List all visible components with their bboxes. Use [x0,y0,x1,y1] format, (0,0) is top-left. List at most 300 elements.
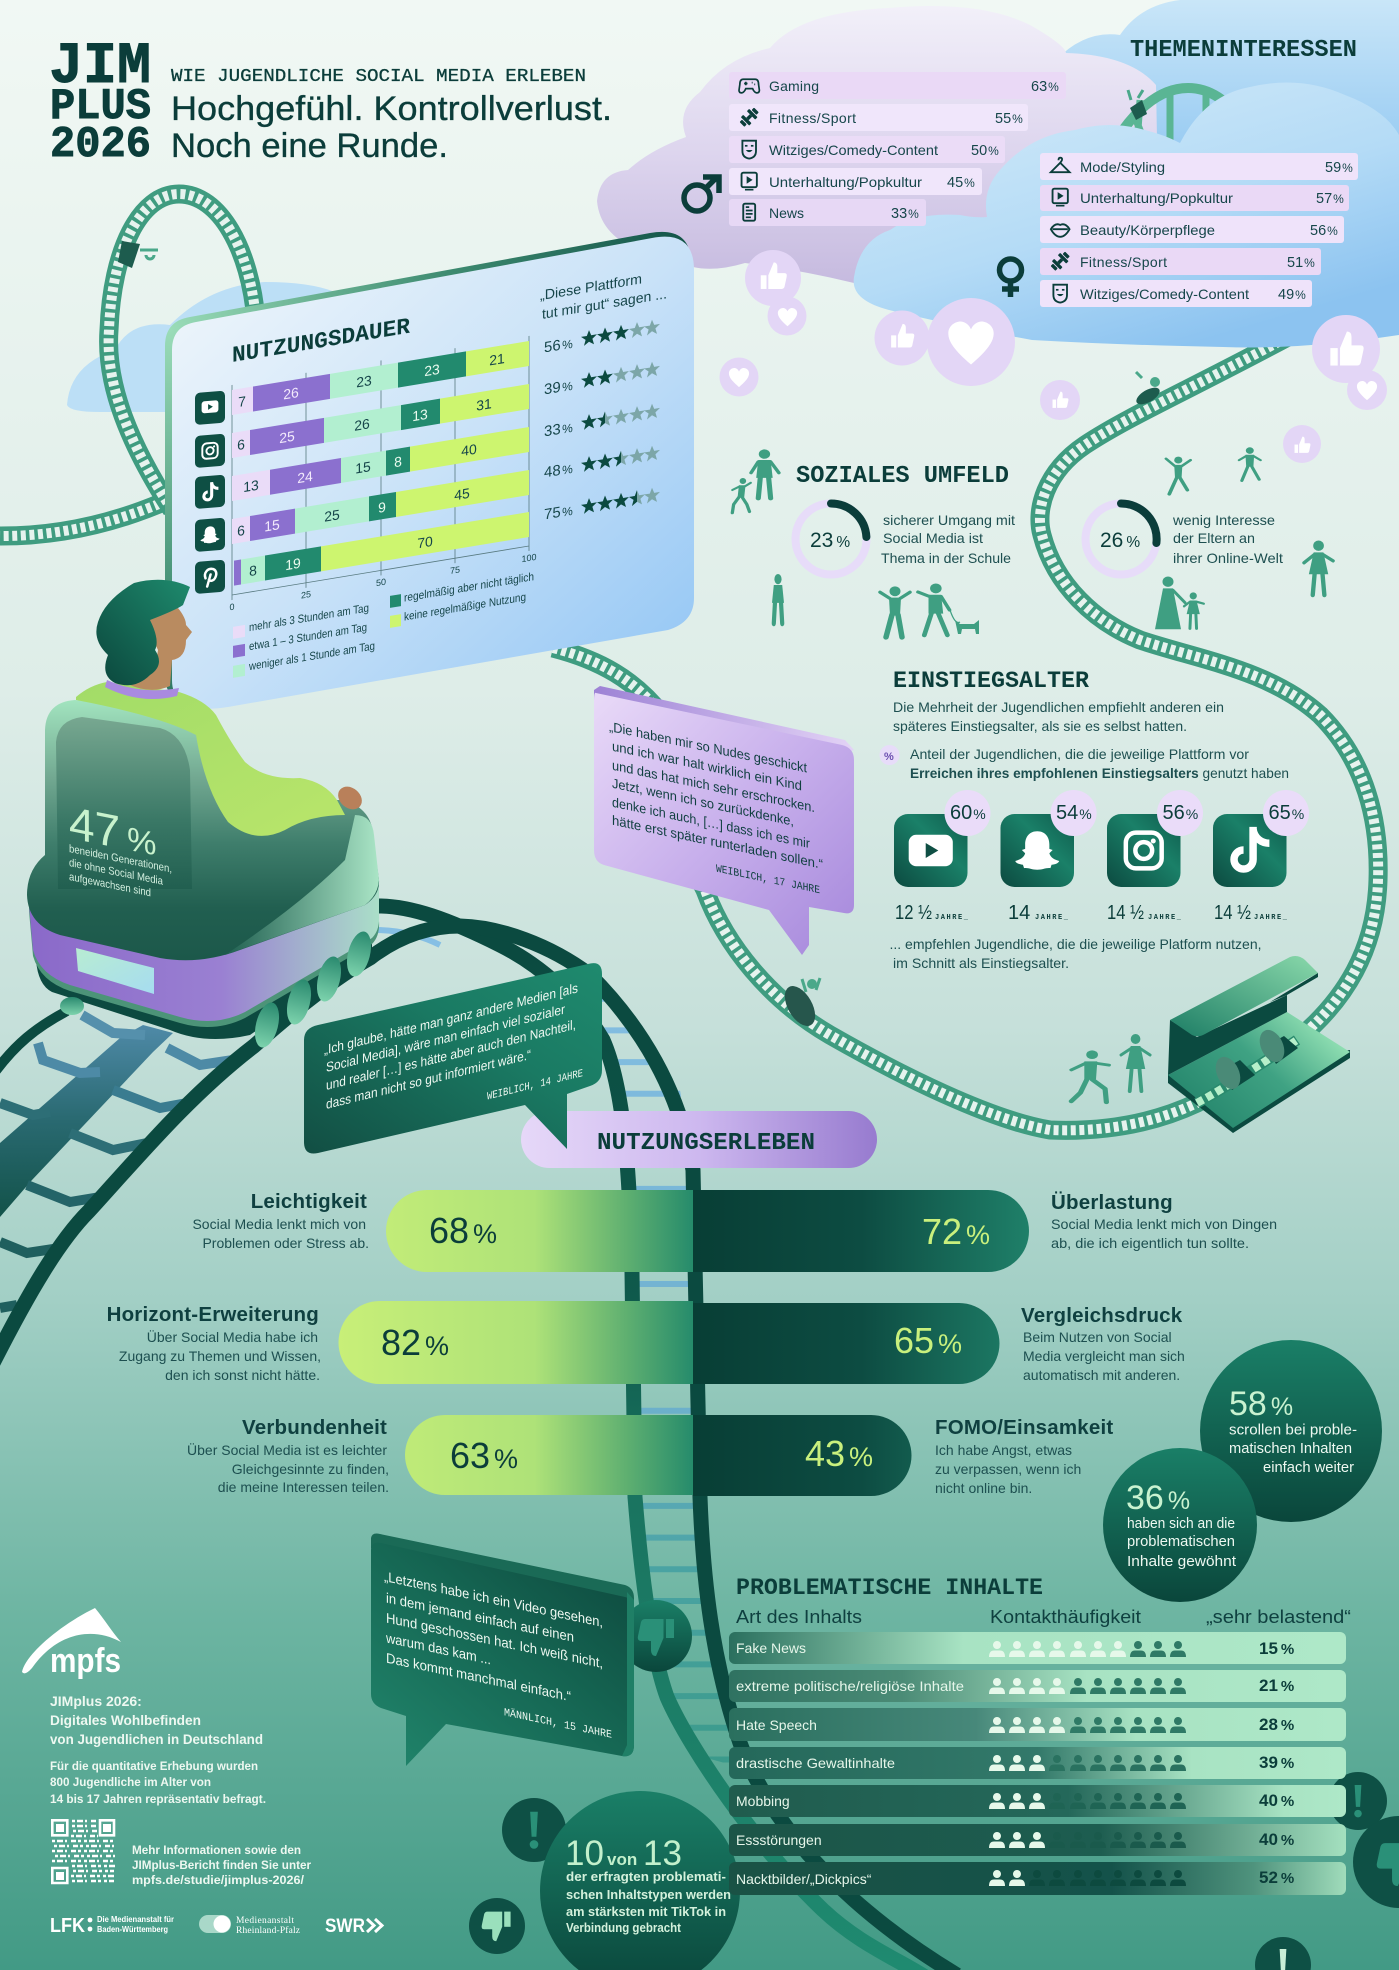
column headers [736,1607,1351,1627]
heading pill: nutzungserleben: NUTZUNGSERLEBEN [597,1130,815,1157]
row: gewaltinhalte: drastische Gewaltinhalte [736,1755,895,1771]
quote: green 1 [304,963,602,1154]
positive bars: 68% [429,1210,497,1251]
seat [27,700,379,960]
row: mobbing: Mobbing [736,1793,790,1809]
label: vergleichsdruck: Vergleichsdruck [1021,1304,1183,1327]
female bars: Unterhaltung/Popkultur [1080,190,1233,206]
text 26: wenig Interesse [1172,512,1275,528]
bar: instagram: 13 [412,406,428,424]
rim [594,686,854,752]
label: vergleichsdruck [1021,1304,1185,1383]
column headers: Art des Inhalts [736,1607,862,1627]
text: Social Media], wäre man einfach viel sozialer [326,1002,565,1075]
callout: 58 percent: einfach weiter [1263,1460,1354,1476]
row: gewaltinhalte [729,1747,1346,1779]
ages [895,902,1288,924]
callout: 10 von 13: 13 [643,1834,682,1873]
icon: tiktok: 65% [1268,802,1304,824]
label: ueberlastung: Überlastung [1051,1191,1173,1214]
rating column: 39% [544,377,573,398]
text: Das kommt manchmal einfach.“ [386,1650,571,1704]
male bars: 45% [947,175,975,191]
purple base [29,880,379,1021]
icon: tiktok [1213,790,1309,887]
bar: snapchat: 9 [378,499,386,516]
text: „Ich glaube, hätte man ganz andere Medien [als [324,980,578,1057]
label: fomo: zu verpassen, wenn ich [935,1461,1081,1477]
positive bars: 63% [450,1435,518,1476]
bubble [594,693,854,955]
row: fake news: Fake News [736,1640,806,1656]
heading: EINSTIEGSALTER [893,669,1090,695]
male bars: News [769,205,804,221]
study title [50,1693,263,1747]
rim [371,1534,634,1606]
study title: von Jugendlichen in Deutschland [50,1731,263,1747]
bar: snapchat: 6 [237,522,245,539]
panel: problematische inhalte [729,1575,1351,1895]
quote text: WEIBLICH, 17 JAHRE [716,864,820,897]
ages: 12 ½ [895,902,932,924]
callout: 58 percent: 58% [1229,1385,1293,1423]
text: „Letztens habe ich ein Video gesehen, [384,1568,603,1630]
row: gewaltinhalte: 39% [1259,1753,1294,1772]
bar: pinterest [234,512,529,586]
label: leichtigkeit: Problemen oder Stress ab. [202,1235,369,1251]
callout: 58 percent: scrollen bei proble- [1229,1422,1357,1438]
quote text: denke ich auch, […] dass ich es mir [612,795,810,851]
more info [132,1843,311,1887]
bar: pinterest: 8 [249,562,257,579]
male bars: 55% [995,111,1023,127]
ages: JAHRE_ [1035,914,1069,922]
girl bottom [1121,1034,1150,1091]
legend: regelmäßig aber nicht täglich [404,571,534,605]
bar: instagram [232,384,529,458]
riders on track [118,90,1162,1031]
negative bars: 43% [805,1433,873,1474]
rider: upper right [1134,372,1162,408]
logo: medienanstalt rlp: Medienanstalt [236,1916,294,1926]
panel: soziales umfeld [796,463,1283,574]
male bars: Unterhaltung/Popkultur [769,174,922,190]
rider: arch [1128,90,1147,120]
female bars: Fitness/Sport [1080,254,1167,270]
ages: 14 ½ [1107,902,1144,924]
positive bars [338,1190,693,1495]
label: horizont [107,1303,321,1383]
more info: JIMplus-Bericht finden Sie unter [132,1858,311,1872]
donut 26 [1086,503,1157,574]
callout: 36 percent: haben sich an die [1127,1516,1235,1532]
icon: youtube: 60% [950,802,986,824]
station [1168,956,1350,1133]
stat 47: aufgewachsen sind [69,871,151,899]
ages: JAHRE_ [1254,914,1288,922]
rating column: „Diese Plattform [540,270,642,303]
rating column: 75% [544,502,573,523]
more info: mpfs.de/studie/jimplus-2026/ [132,1873,305,1887]
child [732,478,751,513]
qr code [52,1820,115,1883]
quote text: Jetzt, wenn ich so zurückdenke, [612,776,794,829]
bar: snapchat: 45 [454,485,470,503]
axis labels: 50 [376,577,386,588]
seat back panel [56,717,192,889]
label: verbundenheit: Gleichgesinnte zu finden, [232,1461,389,1477]
logo: mpfs: mpfs [50,1642,121,1680]
quote: purple [594,686,854,955]
axis labels: 75 [450,564,460,576]
bar: pinterest: 70 [417,533,433,551]
quote: green 3 [371,1534,634,1766]
callout: 58 percent: matischen Inhalten [1229,1441,1352,1457]
callout: 36 percent: problematischen [1127,1534,1235,1550]
logo: lfk [50,1915,174,1937]
bar: tiktok [232,427,529,501]
callout: 10 von 13: von [607,1850,637,1869]
label: fomo [935,1416,1113,1496]
text 23: sicherer Umgang mit [883,512,1015,528]
intro: Die Mehrheit der Jugendlichen empfiehlt anderen ein [893,699,1224,715]
female bars: 49% [1278,287,1306,303]
legend [233,571,534,678]
logo: medienanstalt rlp: Rheinland-Pfalz [236,1925,300,1936]
mother and child [1155,576,1204,629]
percent legend [880,745,1289,781]
front rail [0,926,957,1970]
cloud: male interests [597,6,1160,300]
rider hair [96,580,190,685]
standing kid [772,574,784,623]
logo: lfk: Baden-Württemberg [97,1925,168,1934]
coaster car with rider [27,580,379,1050]
kicker: WIE JUGENDLICHE SOCIAL MEDIA ERLEBEN [171,67,586,87]
row: essstoerungen [729,1824,1346,1856]
axis labels [229,552,537,612]
row: nacktbilder [729,1862,1346,1895]
track: big curve right [553,325,1378,1130]
row: extreme inhalte [729,1670,1346,1702]
legend: keine regelmäßige Nutzung [404,592,526,624]
heading: SOZIALES UMFELD [796,463,1009,490]
title block [49,35,612,170]
text 26: ihrer Online-Welt [1173,550,1283,566]
panel: einstiegsalter [880,669,1309,971]
text: dass man nicht so gut informiert wäre.“ [326,1047,531,1112]
percent legend: Erreichen ihres empfohlenen Einstiegsalters genutzt haben [910,765,1289,781]
quote text: und ich war halt wirklich ein Kind [612,739,802,793]
cloud: left behind screen [67,282,335,412]
panel: themeninteressen [684,37,1358,307]
bar: snapchat: 15 [264,516,280,535]
label: fomo: Ich habe Angst, etwas [935,1442,1072,1458]
bar: youtube: 26 [283,384,299,403]
logo: swr: SWR [325,1916,365,1937]
shadow of track [0,1015,233,1308]
wheels [60,929,375,1050]
donut 23: 23% [810,529,850,552]
row: hate speech: 28% [1259,1715,1294,1734]
callout: 36 percent: Inhalte gewöhnt [1127,1554,1236,1570]
female bars: Mode/Styling [1080,159,1165,175]
rider: loop [118,241,158,268]
runner [1239,447,1261,481]
label: leichtigkeit: Leichtigkeit [251,1190,367,1213]
percent legend: Anteil der Jugendlichen, die die jeweilige Plattform vor [910,746,1249,762]
donut 26: 26% [1100,529,1140,552]
bar: tiktok: 24 [297,468,313,486]
callout: 10 von 13: der erfragten problemati- [566,1869,726,1884]
label: verbundenheit: Über Social Media ist es leichter [187,1441,387,1458]
undercarriage [36,925,372,1039]
column headers: Kontakthäufigkeit [990,1607,1141,1627]
text: Hund geschossen hat. Ich weiß nicht, [386,1610,603,1671]
method [50,1759,266,1806]
rating column: 56% [544,335,573,356]
male bars: 33% [891,206,919,222]
like and heart bubbles [720,250,1387,463]
text 26 [1172,512,1283,566]
icon circles: warning and dislike [469,1600,1399,1970]
bar: youtube [232,341,529,415]
logo: lfk: Die Medienanstalt für [97,1915,174,1924]
screen rim [165,232,691,703]
logo: lfk: LFK [50,1915,85,1937]
label: horizont: den ich sonst nicht hätte. [165,1367,320,1383]
percent legend: % [884,751,894,763]
bar: youtube: 23 [356,372,372,390]
headline [171,90,612,165]
axis labels: 100 [521,552,537,564]
panel: nutzungsdauer screen [165,232,694,709]
label: verbundenheit: Verbundenheit [242,1416,387,1439]
upper tie [375,930,440,945]
row: essstoerungen: 40% [1259,1830,1294,1849]
label: vergleichsdruck: Beim Nutzen von Social [1023,1329,1172,1345]
bar: instagram: 26 [354,415,370,434]
bar: tiktok: 13 [243,477,259,495]
female bars: 56% [1310,223,1338,239]
callout: 10 von 13: schen Inhaltstypen werden [566,1887,731,1902]
bar: youtube: 7 [238,393,246,410]
headline: Hochgefühl. Kontrollverlust. [171,90,612,128]
text: WEIBLICH, 14 JAHRE [487,1068,583,1104]
female bars: 59% [1325,160,1353,176]
text: in dem jemand einfach auf einen [386,1590,574,1645]
quote text [609,719,823,898]
screen face [172,237,694,709]
row: hate speech [729,1708,1346,1741]
female bars [1040,153,1358,307]
right edge [622,1592,634,1756]
callout: 10 von 13 [540,1791,740,1970]
study title: Digitales Wohlbefinden [50,1712,201,1728]
girl right [1304,540,1333,595]
quote text: hätte erst später runterladen sollen.“ [612,813,823,872]
label: leichtigkeit [192,1190,369,1251]
cloud: female interests [854,82,1399,348]
text [384,1568,612,1742]
female bars: 57% [1316,191,1344,207]
name plate [76,948,154,994]
label: ueberlastung: ab, die ich eigentlich tun sollte. [1051,1235,1249,1251]
text: MÄNNLICH, 15 JAHRE [504,1706,612,1742]
male bars: 50% [971,143,999,159]
callout: 36 percent: 36% [1126,1479,1190,1517]
intro: späteres Einstiegsalter, als sie es selbst hatten. [893,718,1187,734]
row: mobbing: 40% [1259,1791,1294,1810]
ages: 14 ½ [1214,902,1251,924]
rider hand [334,782,366,814]
row: mobbing [729,1785,1346,1817]
male bars: Gaming [769,78,819,94]
stat 47: 47% [69,796,156,865]
stars [581,318,660,514]
icon: snapchat [1000,790,1097,887]
track: arch between clouds [1116,88,1245,170]
icon: youtube [894,790,990,887]
bar: tiktok: 8 [394,453,402,470]
logo wordmark: JIM [49,35,151,100]
footer [22,1608,382,1937]
donut 23 [796,504,866,574]
foreground rails [0,906,957,1970]
text [324,979,583,1143]
study title: JIMplus 2026: [50,1693,142,1709]
label: verbundenheit [187,1416,389,1495]
text 23: Social Media ist [883,530,983,546]
rider body [76,682,345,836]
negative bars [693,1190,1029,1496]
bar: snapchat: 25 [324,506,340,525]
text: und realer […] es hätte aber auch den Nachteil, [326,1017,576,1093]
ages: JAHRE_ [935,914,969,922]
closing text: im Schnitt als Einstiegsalter. [893,955,1069,971]
rating column: tut mir gut“ sagen ... [542,285,667,322]
row: extreme inhalte: extreme politische/religiöse Inhalte [736,1678,964,1694]
text 23: Thema in der Schule [881,550,1011,566]
legend: weniger als 1 Stunde am Tag [248,640,375,673]
seat side light [225,815,379,955]
male bars: Witziges/Comedy-Content [769,142,938,158]
negative bars: 72% [922,1211,990,1252]
row: nacktbilder: 52% [1259,1868,1294,1887]
label: horizont: Zugang zu Themen und Wissen, [119,1348,321,1364]
row: extreme inhalte: 21% [1259,1676,1294,1695]
cloud: top right back [1056,0,1399,180]
heading pill: nutzungserleben [521,1111,877,1168]
heading: NUTZUNGSDAUER [232,314,410,369]
runner bottom [1071,1050,1109,1102]
label: leichtigkeit: Social Media lenkt mich von [192,1216,366,1232]
rider neck and face [125,608,192,690]
male bars: Fitness/Sport [769,110,856,126]
bubble [371,1543,634,1766]
track: loop [0,194,256,536]
silhouettes: people [732,447,1333,1102]
text 23 [881,512,1015,566]
callout: 10 von 13: Verbindung gebracht [566,1920,682,1935]
label: vergleichsdruck: Media vergleicht man sich [1023,1348,1185,1364]
platform icons [195,391,225,594]
label: fomo: FOMO/Einsamkeit [935,1416,1113,1439]
label: verbundenheit: die meine Interessen teilen. [218,1479,389,1495]
girl with dog [918,583,979,635]
row: fake news [729,1632,1346,1664]
rear rail [375,906,930,1970]
base band [29,886,379,1027]
logo wordmark: PLUS [50,82,151,132]
row: fake news: 15% [1259,1639,1294,1658]
icon: instagram: 56% [1162,802,1198,824]
male bars [729,72,1066,226]
skewed content [229,266,667,678]
axis labels: 0 [229,602,235,612]
logo wordmark [49,35,151,170]
label: vergleichsdruck: automatisch mit anderen. [1023,1367,1180,1383]
jumper [1166,457,1191,494]
callout: 36 percent [1103,1448,1257,1602]
stat 47 [69,796,172,904]
rating column: 48% [544,460,573,481]
ages: JAHRE_ [1148,914,1182,922]
row: nacktbilder: Nacktbilder/„Dickpics“ [736,1871,872,1887]
callout: 10 von 13: am stärksten mit TikTok in [566,1904,726,1919]
female symbol [1000,259,1022,297]
bar: tiktok: 15 [355,458,371,477]
intro [893,699,1224,734]
icon: instagram [1107,790,1203,887]
row: essstoerungen: Essstörungen [736,1832,822,1848]
text: warum das kam ... [385,1629,491,1667]
column headers: „sehr belastend“ [1206,1607,1351,1627]
callout: 58 percent [1200,1340,1382,1522]
label: ueberlastung [1051,1191,1277,1251]
male symbol [684,177,719,211]
headline: Noch eine Runde. [171,127,448,165]
female bars: 51% [1287,255,1315,271]
chart: nutzungserleben bars [107,1190,1277,1496]
heading: PROBLEMATISCHE INHALTE [736,1575,1043,1601]
male bars: 63% [1031,79,1059,95]
bar: pinterest: 19 [285,555,301,573]
female bars: Beauty/Körperpflege [1080,222,1215,238]
label: horizont: Über Social Media habe ich [147,1328,318,1345]
teen arms out [880,586,910,637]
ages: 14 [1008,902,1030,924]
rating column: 33% [544,419,573,440]
callout: 10 von 13: 10 [565,1834,604,1873]
bar: instagram: 25 [279,428,295,446]
legend: etwa 1 – 3 Stunden am Tag [249,622,367,653]
bar: snapchat [232,470,529,544]
bar: tiktok: 40 [461,441,477,459]
rating column [540,266,667,524]
grid lines [232,336,529,600]
negative bars: 65% [894,1320,962,1361]
stacked bars [232,341,529,586]
bar: instagram: 31 [476,395,492,414]
label: fomo: nicht online bin. [935,1480,1032,1496]
label: horizont: Horizont-Erweiterung [107,1303,319,1326]
icon: snapchat: 54% [1056,802,1092,824]
method: 14 bis 17 Jahren repräsentativ befragt. [50,1792,266,1806]
row: hate speech: Hate Speech [736,1717,817,1733]
rider: lower [779,978,821,1031]
quote text: und das hat mich sehr erschrocken. [612,758,815,815]
